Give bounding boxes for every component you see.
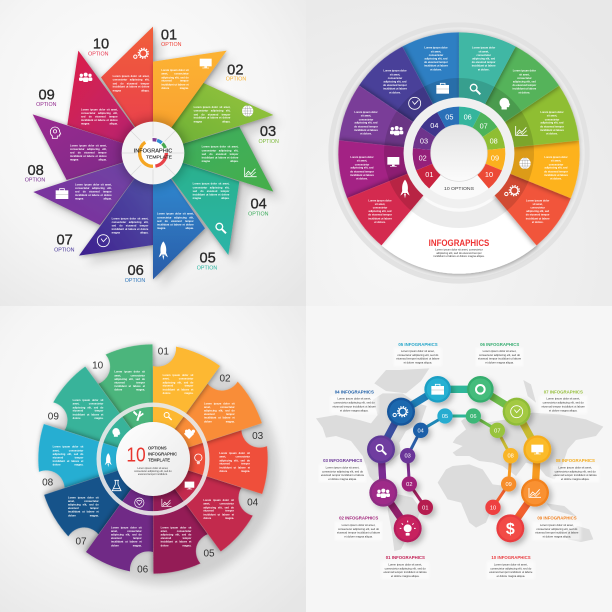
option titles <box>323 342 595 560</box>
icon: leaf <box>133 411 144 421</box>
text block 10: Lorem ipsum dolor sit amet, consectetur adipiscing elit, sed do eiusmod tempor incididunt ut labore et dolore magna. <box>114 370 145 391</box>
icon: chart <box>245 167 257 177</box>
segment: magenta <box>326 119 414 198</box>
notch numbers: 04 <box>247 497 259 508</box>
small nodes: 10 <box>490 505 496 511</box>
small nodes: 08 <box>508 454 514 460</box>
hub title: TEMPLATE <box>148 458 170 463</box>
node: clock <box>503 398 531 426</box>
node: ring <box>467 376 494 403</box>
notch numbers: 09 <box>48 412 59 423</box>
text block blue: Lorem ipsum dolor sit amet, consectetur adipiscing elit, sed do eiusmod tempor incididunt ut labore et dolore. <box>424 46 448 71</box>
label: 02 <box>226 62 246 83</box>
label: 09: OPTION <box>36 102 57 108</box>
text block 02: Lorem ipsum dolor sit amet, consectetur adipiscing elit, sed do eiusmod tempor incididunt ut labore et dolore magna. <box>161 69 189 90</box>
icon: magnifier <box>216 223 226 233</box>
label: 09: 09 <box>39 87 55 103</box>
label: 04: OPTION <box>248 212 269 218</box>
small nodes: 05 <box>442 414 448 420</box>
heading: infographics: INFOGRAPHICS <box>429 238 489 248</box>
option titles: 03 INFOGRAPHICS <box>323 458 362 463</box>
small nodes: 09 <box>506 482 512 488</box>
panel: notched circle infographic <box>0 342 306 612</box>
small nodes: 01 <box>422 505 428 511</box>
hub title: 10 <box>126 444 146 466</box>
segment: indigo <box>359 39 450 126</box>
label: 07 <box>54 233 75 254</box>
segment 10: green <box>87 329 207 459</box>
icon: clock <box>97 235 109 247</box>
text block 06: Lorem ipsum dolor sit amet, consectetur adipiscing elit, sed do eiusmod tempor incididunt ut labore et dolore magna aliqua. <box>157 212 194 230</box>
text block 06: Lorem ipsum dolor sit amet, consectetur adipiscing elit, sed do eiusmod tempor incididunt ut labore et dolore magna aliqua. <box>478 350 521 364</box>
text block crimson: Lorem ipsum dolor sit amet, consectetur adipiscing elit, sed do eiusmod tempor incididunt ut labore et dolore. <box>368 199 392 224</box>
number ring <box>408 102 510 191</box>
petal: lime option 03 <box>153 81 273 153</box>
text block 04: Lorem ipsum dolor sit amet, consectetur adipiscing elit, sed do eiusmod tempor incididunt ut labore et dolore magna. <box>203 499 234 520</box>
icon: globe <box>242 105 253 117</box>
option titles: 06 INFOGRAPHICS <box>480 342 519 347</box>
text block indigo: Lorem ipsum dolor sit amet, consectetur adipiscing elit, sed do eiusmod tempor incididunt ut labore et dolore. <box>383 69 407 94</box>
icon: magnifier <box>164 412 172 420</box>
icon: globe <box>519 158 531 169</box>
segment: lime <box>500 86 591 173</box>
text block 09: Lorem ipsum dolor sit amet, consectetur adipiscing elit, sed do eiusmod tempor incididunt ut labore et dolore magna aliqua. <box>70 144 107 161</box>
text block 07: Lorem ipsum dolor sit amet, consectetur adipiscing elit, sed do eiusmod tempor incididunt ut labore et dolore magna. <box>68 496 99 517</box>
label: 08: 08 <box>28 163 44 179</box>
text block 10: Lorem ipsum dolor sit amet, consectetur adipiscing elit, sed do eiusmod tempor incididunt ut labore et dolore magna aliqua. <box>81 108 118 125</box>
label: 10: 10 <box>93 37 109 53</box>
text block purple: Lorem ipsum dolor sit amet, consectetur adipiscing elit, sed do eiusmod tempor incididunt ut labore et dolore. <box>354 111 378 135</box>
ring numbers: 02 <box>419 153 427 162</box>
text block teal: Lorem ipsum dolor sit amet, consectetur adipiscing elit, sed do eiusmod tempor incididunt ut labore et dolore. <box>472 46 496 71</box>
ring numbers: 01 <box>425 170 433 179</box>
node: chart <box>521 479 549 507</box>
icon: head <box>112 428 120 437</box>
segment 05: wine <box>99 459 219 589</box>
label: 06: OPTION <box>125 278 145 284</box>
segment: red <box>483 171 571 251</box>
label: 09 <box>36 87 57 108</box>
icon: flask <box>112 480 121 491</box>
label: 10 <box>88 37 109 57</box>
segment 08: cyan <box>25 395 153 494</box>
centre circle <box>431 125 487 181</box>
option titles: 02 INFOGRAPHICS <box>339 516 378 521</box>
label: 06: 06 <box>128 263 144 279</box>
text block bottom: Lorem ipsum dolor sit amet, consectetur adipiscing elit, sed do eiusmod tempor incididunt ut labore et dolore magna aliqua. <box>433 248 484 258</box>
node: gears <box>387 398 415 426</box>
ring numbers: 05 <box>445 113 453 122</box>
notch numbers: 08 <box>42 478 54 489</box>
white bottom sector <box>381 185 537 274</box>
small nodes: 02 <box>406 482 412 488</box>
panel: pinwheel infographic <box>0 26 306 306</box>
text block 06: Lorem ipsum dolor sit amet, consectetur adipiscing elit, sed do eiusmod tempor incididunt ut labore et dolore magna. <box>111 526 142 547</box>
notch numbers: 10 <box>92 361 104 372</box>
panel: circular wheel infographic <box>306 0 612 284</box>
text block 05: Lorem ipsum dolor sit amet, consectetur adipiscing elit, sed do eiusmod tempor incididunt ut labore et dolore magna aliqua. <box>396 350 439 364</box>
notch numbers: 05 <box>203 549 215 560</box>
label: 10: OPTION <box>88 51 109 57</box>
icon: rocket <box>400 180 410 198</box>
label: 02: OPTION <box>226 77 246 83</box>
small nodes: 04 <box>418 428 424 434</box>
petal: blue option 06 <box>153 153 205 279</box>
segment 06: purple <box>86 459 153 571</box>
label: 07: 07 <box>57 233 73 249</box>
option titles: 05 INFOGRAPHICS <box>398 342 438 347</box>
node: bulb <box>394 514 422 542</box>
label: 08: OPTION <box>25 178 45 184</box>
text block lime: Lorem ipsum dolor sit amet, consectetur adipiscing elit, sed do eiusmod tempor incididunt ut labore et dolore. <box>540 111 564 135</box>
label: 03 <box>258 124 279 145</box>
ring numbers: 10 <box>485 170 493 179</box>
segment: teal <box>459 32 516 104</box>
icon: head <box>500 98 510 109</box>
icon: briefcase <box>436 83 449 94</box>
outer ring <box>328 22 590 284</box>
hub: TEMPLATE <box>146 155 173 161</box>
panel: world map infographic <box>316 342 603 578</box>
option titles: 09 INFOGRAPHICS <box>537 516 577 521</box>
label: 08 <box>25 163 45 184</box>
text block 02: Lorem ipsum dolor sit amet, consectetur adipiscing elit, sed do eiusmod tempor incididunt ut labore et dolore magna. <box>204 402 235 423</box>
small nodes: 03 <box>405 454 411 460</box>
notch numbers: 01 <box>158 347 169 358</box>
petal: crimson option 10 <box>67 51 153 153</box>
segment: amber <box>508 140 585 204</box>
icon: rocket <box>159 241 168 260</box>
segment: blue <box>402 20 486 110</box>
node: magnifier <box>367 435 395 463</box>
text block amber: Lorem ipsum dolor sit amet, consectetur adipiscing elit, sed do eiusmod tempor incididunt ut labore et dolore. <box>544 156 568 180</box>
text block 01: Lorem ipsum dolor sit amet, consectetur adipiscing elit, sed do eiusmod tempor incididunt ut labore et dolore magna. <box>163 374 193 395</box>
hub title: INFOGRAPHIC <box>148 451 177 456</box>
notch numbers: 07 <box>75 537 87 548</box>
text block 08: Lorem ipsum dolor sit amet, consectetur adipiscing elit, sed do eiusmod tempor incididunt ut labore et dolore magna. <box>53 445 83 466</box>
icon: monitor <box>185 482 194 489</box>
text block hub: Lorem ipsum dolor sit amet, consectetur adipiscing elit, sed do eiusmod tempor incididunt. <box>134 467 172 476</box>
segment: green <box>482 46 566 136</box>
segment 07: navy <box>33 420 153 550</box>
segment 02: orange <box>153 368 273 498</box>
segment: purple <box>339 84 416 148</box>
petal: green option 04 <box>153 127 273 192</box>
icon: gears <box>134 48 148 58</box>
segment 04: crimson <box>132 459 260 557</box>
text block 01: Lorem ipsum dolor sit amet, consectetur adipiscing elit, sed do eiusmod tempor incididunt ut labore et dolore magna aliqua. <box>113 75 149 92</box>
option titles: 10 INFOGRAPHICS <box>491 555 531 560</box>
hub title: OPTIONS <box>148 445 167 450</box>
icon: heart <box>135 498 144 507</box>
ring numbers: 09 <box>491 153 499 162</box>
node: people <box>369 479 397 507</box>
hub <box>116 422 190 496</box>
label: 04: 04 <box>251 197 267 213</box>
icon: monitor <box>387 157 399 167</box>
text block red: Lorem ipsum dolor sit amet, consectetur adipiscing elit, sed do eiusmod tempor incididunt ut labore et dolore. <box>526 199 550 224</box>
text block 01: Lorem ipsum dolor sit amet, consectetur adipiscing elit, sed do eiusmod tempor incididunt ut labore et dolore magna aliqua. <box>384 563 427 577</box>
hub <box>118 118 188 188</box>
icon: chart <box>162 499 171 506</box>
notch numbers: 03 <box>252 431 264 442</box>
option titles: 01 INFOGRAPHICS <box>386 555 425 560</box>
label: 03: 03 <box>260 124 276 140</box>
petal: indigo option 07 <box>79 153 153 256</box>
ring numbers: 03 <box>420 136 428 145</box>
ring numbers: 04 <box>430 121 438 130</box>
node: briefcase <box>424 376 451 403</box>
small nodes: 06 <box>470 414 476 420</box>
text block 05: Lorem ipsum dolor sit amet, consectetur adipiscing elit, sed do eiusmod tempor incididunt ut labore et dolore magna aliqua. <box>193 182 229 200</box>
label: 03: OPTION <box>258 139 279 145</box>
notch numbers <box>42 347 264 575</box>
text block 07: Lorem ipsum dolor sit amet, consectetur adipiscing elit, sed do eiusmod tempor incididunt ut labore et dolore magna aliqua. <box>542 397 585 412</box>
icon: bulb <box>195 454 202 464</box>
label: 05: OPTION <box>197 265 217 271</box>
icon: monitor <box>200 59 212 68</box>
text block 03: Lorem ipsum dolor sit amet, consectetur adipiscing elit, sed do eiusmod tempor incididunt ut labore et dolore magna aliqua. <box>321 466 364 480</box>
label: 10 options: 10 OPTIONS <box>444 186 475 192</box>
icon: head <box>50 127 61 138</box>
small nodes: 07 <box>494 428 500 434</box>
label: 01: 01 <box>161 27 177 43</box>
text block 08: Lorem ipsum dolor sit amet, consectetur adipiscing elit, sed do eiusmod tempor incididunt ut labore et dolore magna aliqua. <box>554 466 597 480</box>
text block 10: Lorem ipsum dolor sit amet, consectetur adipiscing elit, sed do eiusmod tempor incididunt ut labore et dolore magna aliqua. <box>489 563 532 577</box>
small nodes <box>400 408 518 515</box>
option titles: 08 INFOGRAPHICS <box>556 458 595 463</box>
label: 04 <box>248 197 269 218</box>
ring numbers: 06 <box>464 113 472 122</box>
label: 05 <box>197 250 217 271</box>
text block 03: Lorem ipsum dolor sit amet, consectetur adipiscing elit, sed do eiusmod tempor incididunt ut labore et dolore magna. <box>219 452 250 473</box>
icon: clock <box>409 97 421 109</box>
icon: people <box>79 73 92 82</box>
node: monitor <box>523 435 551 463</box>
icon: magnifier <box>470 84 480 94</box>
notch numbers: 02 <box>219 373 231 384</box>
ring numbers <box>419 113 499 179</box>
text block 04: Lorem ipsum dolor sit amet, consectetur adipiscing elit, sed do eiusmod tempor incididunt ut labore et dolore magna aliqua. <box>333 397 376 412</box>
inner chain connectors <box>408 416 511 507</box>
node: dollar: $ <box>506 521 515 538</box>
icon: people <box>390 126 403 135</box>
segment 03: red <box>153 424 281 523</box>
label: 06 <box>125 263 145 284</box>
label: 01 <box>161 27 182 48</box>
petal: orange option 02 <box>153 51 227 153</box>
segment 09: teal <box>46 361 174 459</box>
text block green: Lorem ipsum dolor sit amet, consectetur adipiscing elit, sed do eiusmod tempor incididunt ut labore et dolore. <box>512 69 536 94</box>
petal: magenta option 09 <box>33 114 153 180</box>
label: 01: OPTION <box>161 42 182 48</box>
text block 05: Lorem ipsum dolor sit amet, consectetur adipiscing elit, sed do eiusmod tempor incididunt ut labore et dolore magna. <box>161 526 191 547</box>
hub title <box>126 444 177 466</box>
text block magenta: Lorem ipsum dolor sit amet, consectetur adipiscing elit, sed do eiusmod tempor incididunt ut labore et dolore. <box>350 156 374 180</box>
ring numbers: 07 <box>480 121 488 130</box>
hub: INFOGRAPHIC <box>134 149 172 155</box>
icon: rocket <box>105 453 112 467</box>
segment: crimson <box>338 154 428 245</box>
segment 01: yellow <box>153 347 220 459</box>
option titles: 04 INFOGRAPHICS <box>335 389 374 394</box>
option titles: 07 INFOGRAPHICS <box>544 389 583 394</box>
text block 07: Lorem ipsum dolor sit amet, consectetur adipiscing elit, sed do eiusmod tempor incididunt ut labore et dolore magna aliqua. <box>112 217 148 234</box>
label: 02: 02 <box>227 62 243 78</box>
petal: red option 01 <box>101 27 153 153</box>
world map <box>316 368 603 551</box>
petal: teal option 05 <box>153 153 239 255</box>
node: dollar <box>496 514 524 542</box>
ring numbers: 08 <box>490 136 498 145</box>
icon: puzzle <box>184 429 195 439</box>
icon: gears <box>505 186 519 196</box>
text block 09: Lorem ipsum dolor sit amet, consectetur adipiscing elit, sed do eiusmod tempor incididunt ut labore et dolore magna. <box>73 399 103 420</box>
text block 09: Lorem ipsum dolor sit amet, consectetur adipiscing elit, sed do eiusmod tempor incididunt ut labore et dolore magna aliqua. <box>535 524 578 538</box>
petal: purple option 08 <box>33 153 153 225</box>
icon: chart <box>516 126 528 135</box>
label: 07: OPTION <box>54 248 75 254</box>
icon: briefcase <box>56 189 68 199</box>
notch numbers: 06 <box>137 564 149 575</box>
grey ring <box>99 405 207 513</box>
text block 08: Lorem ipsum dolor sit amet, consectetur adipiscing elit, sed do eiusmod tempor incididunt ut labore et dolore magna aliqua. <box>75 183 112 200</box>
text block 02: Lorem ipsum dolor sit amet, consectetur adipiscing elit, sed do eiusmod tempor incididunt ut labore et dolore magna aliqua. <box>337 524 380 538</box>
label: 05: 05 <box>200 250 216 266</box>
text block 03: Lorem ipsum dolor sit amet, consectetur adipiscing elit, sed do eiusmod tempor incididunt ut labore et dolore magna aliqua. <box>194 106 230 123</box>
text block 04: Lorem ipsum dolor sit amet, consectetur adipiscing elit, sed do eiusmod tempor incididunt ut labore et dolore magna aliqua. <box>202 145 238 163</box>
inner white ring <box>404 98 514 208</box>
outer chain connectors <box>381 389 537 528</box>
